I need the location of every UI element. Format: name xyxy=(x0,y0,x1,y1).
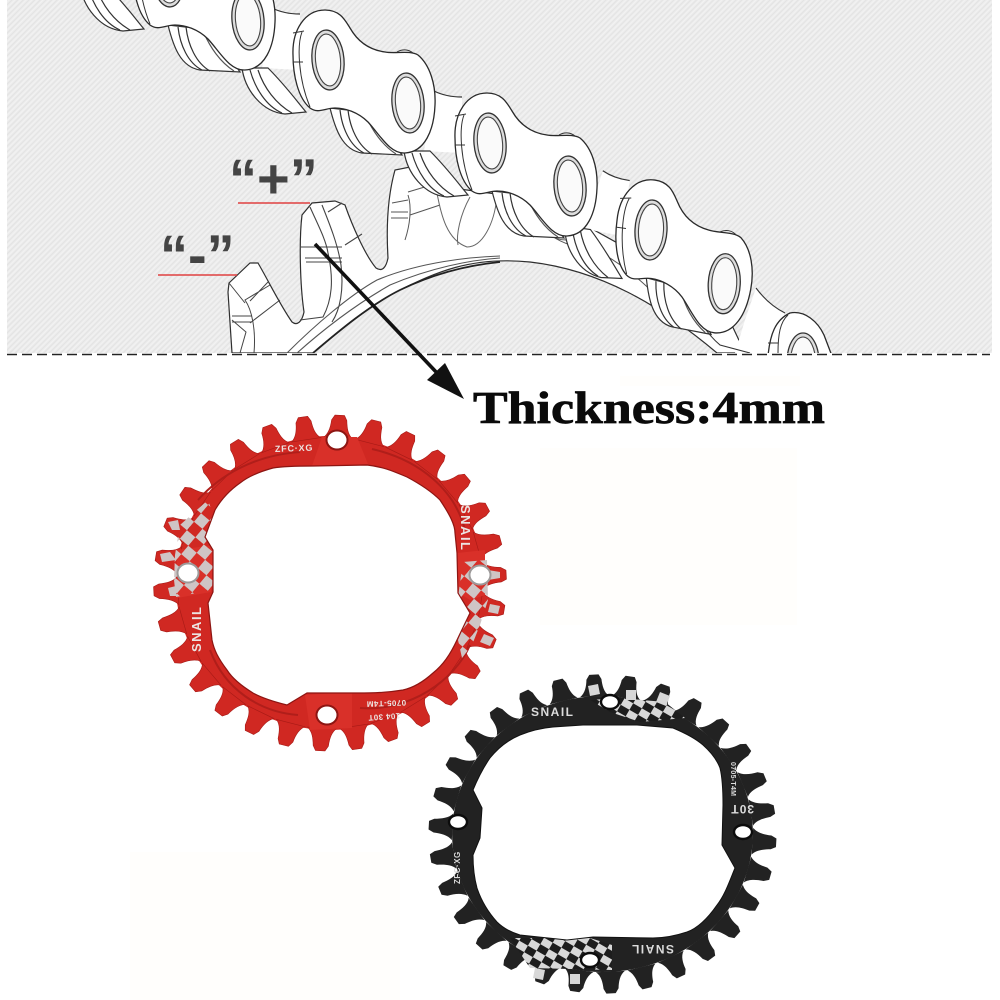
red checker on teeth xyxy=(160,520,500,646)
chain and sprocket line drawing xyxy=(80,0,832,391)
red engraved text: ZFC·XG xyxy=(275,443,313,454)
faint image patches xyxy=(130,376,800,1000)
red engraved text: SNAIL xyxy=(189,606,204,652)
red centre hole xyxy=(205,465,470,705)
red checker patches xyxy=(174,500,488,658)
sprocket teeth and ring xyxy=(228,165,745,353)
black checker patches xyxy=(510,698,685,970)
red gear body and teeth xyxy=(144,406,516,760)
black chainring xyxy=(419,666,786,1000)
red mounting tabs xyxy=(177,437,485,730)
black engraved text: SNAIL xyxy=(630,942,674,956)
black centre hole xyxy=(473,725,735,940)
black bolt holes xyxy=(449,695,752,967)
chain outer plates xyxy=(133,0,832,391)
red engraved text: 0705-T4M xyxy=(366,698,406,708)
black engraved text: 0705-T4M xyxy=(729,762,736,796)
chain rear links xyxy=(80,0,785,353)
black engraved text: SNAIL xyxy=(531,705,574,719)
black engraved text: 30T xyxy=(730,802,754,816)
label: minus tooth: “-” xyxy=(160,223,235,286)
red engraved text: 104 30T xyxy=(368,711,400,722)
black engraved text: ZFC·XG xyxy=(453,851,462,884)
red engraved text: SNAIL xyxy=(458,505,473,552)
red engraved text xyxy=(189,443,473,722)
red chainring xyxy=(144,406,516,760)
black engraved text xyxy=(453,705,754,956)
dashed divider xyxy=(7,354,990,356)
arrow to thickness label xyxy=(315,244,464,399)
red recess bands xyxy=(198,449,470,715)
red bolt holes xyxy=(178,430,490,724)
black gear body and teeth xyxy=(419,666,786,1000)
panel: technical drawing background xyxy=(7,0,992,353)
heading: thickness: Thickness:4mm xyxy=(473,382,825,433)
black checker on teeth xyxy=(533,684,670,984)
label: plus tooth: “+” xyxy=(229,147,318,210)
